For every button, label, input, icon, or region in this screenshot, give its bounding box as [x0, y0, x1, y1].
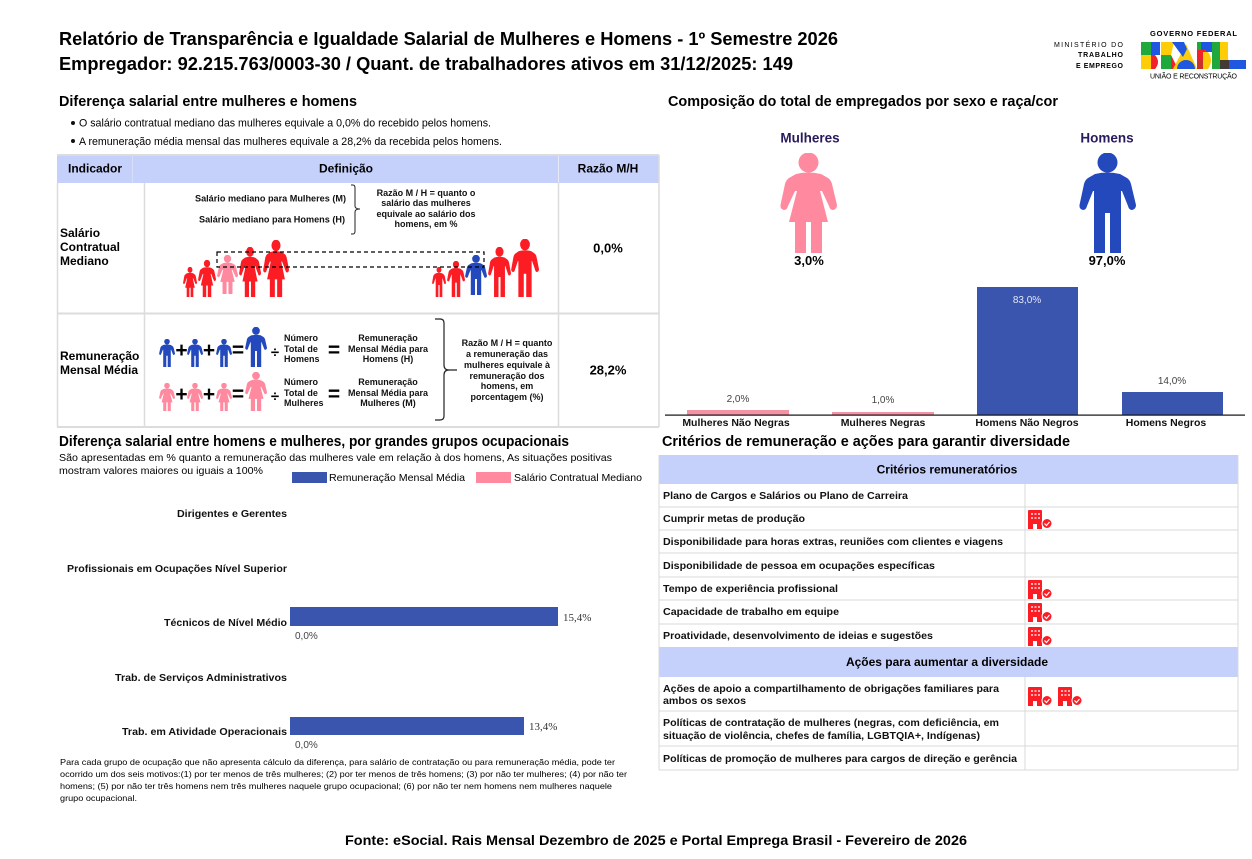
- table header: critérios remuneratórios: [659, 455, 1238, 484]
- brace: remuneração: [435, 319, 457, 420]
- formula: mulheres: Mulheres (M): [360, 398, 416, 408]
- panel: critérios de remuneração: [659, 434, 1238, 770]
- icon: grupo de homens: [432, 239, 539, 297]
- table rows: critérios: Cumprir metas de produção: [663, 513, 805, 525]
- bar chart: raça/cor: 2,0%: [727, 394, 750, 405]
- formula: homens: Homens: [284, 354, 320, 364]
- bar: técnicos: 15,4%: [563, 612, 591, 624]
- legend: [292, 472, 642, 484]
- category labels: [67, 508, 287, 738]
- panel: grupos ocupacionais: [59, 434, 642, 803]
- row label: salário contratual mediano: Contratual: [60, 240, 120, 254]
- row label: salário contratual mediano: Mediano: [60, 254, 109, 268]
- definition: razão remuneração: Razão M / H = quanto: [462, 338, 553, 348]
- formula: mulheres: Mensal Média para: [348, 388, 429, 398]
- table header: [57, 155, 659, 183]
- logo: governo federal brasil: GOVERNO FEDERAL: [1150, 29, 1237, 38]
- bar: técnicos: [290, 607, 591, 642]
- formula: mulheres: =: [232, 383, 244, 406]
- category labels: Trab. em Atividade Operacionais: [122, 726, 287, 738]
- text block: bullet points: A remuneração média mensal das mulheres equivale a 28,2% da recebida pelos homens.: [79, 136, 502, 148]
- text block: bullet points: [71, 118, 502, 148]
- footnote: homens; (5) por não ter três homens nem três mulheres naquele grupo ocupacional; (6) por não ter nem homens nem mulheres naquele: [60, 781, 612, 791]
- logo: governo federal brasil: [1141, 29, 1246, 80]
- table header: ações: [659, 647, 1238, 677]
- definition: razão salário: salário das mulheres: [381, 198, 471, 208]
- definition: razão salário: [376, 188, 476, 229]
- table header: ações: Ações para aumentar a diversidade: [846, 655, 1048, 669]
- figure: mulheres: [780, 130, 840, 268]
- row label: salário contratual mediano: [60, 226, 120, 268]
- table rows: ações: situação de violência, chefes de família, LGBTQIA+, Indígenas): [663, 730, 980, 742]
- title: [59, 29, 838, 74]
- formula: homens: Total de: [284, 344, 318, 354]
- definition: razão remuneração: a remuneração das: [466, 349, 548, 359]
- logo: ministério do trabalho e emprego: E EMPREGO: [1076, 63, 1124, 70]
- formula: homens: +: [203, 339, 215, 362]
- bar chart: raça/cor: Homens Não Negros: [975, 417, 1079, 429]
- bar chart: raça/cor: Mulheres Negras: [841, 417, 925, 429]
- table rows: critérios: Plano de Cargos e Salários ou Plano de Carreira: [663, 490, 908, 502]
- bar chart: raça/cor: 14,0%: [1158, 376, 1186, 387]
- icons: empresa com verificação: [1028, 510, 1082, 706]
- footnote: grupo ocupacional.: [60, 793, 137, 803]
- formula: homens: Homens (H): [363, 354, 413, 364]
- figure: homens: [1079, 130, 1136, 268]
- bar: trabalhadores em atividade operacionais: 0,0%: [295, 740, 318, 751]
- category labels: Dirigentes e Gerentes: [177, 508, 287, 520]
- table rows: critérios: Disponibilidade para horas extras, reuniões com clientes e viagens: [663, 536, 1003, 548]
- bar chart: raça/cor: Mulheres Não Negras: [682, 417, 790, 429]
- table header: critérios remuneratórios: Critérios remuneratórios: [877, 462, 1018, 476]
- bar: trabalhadores em atividade operacionais: 13,4%: [529, 721, 557, 733]
- definition: razão salário: homens, em %: [394, 219, 458, 229]
- footnote: Para cada grupo de ocupação que não apresenta cálculo da diferença, para salário de contratação ou para remuneração média, pode ter: [60, 757, 615, 767]
- logo: ministério do trabalho e emprego: MINISTÉRIO DO: [1054, 40, 1124, 49]
- panel: composição do total: [665, 94, 1245, 429]
- table rows: ações: Políticas de promoção de mulheres para cargos de direção e gerência: [663, 753, 1017, 765]
- table rows: critérios: Disponibilidade de pessoa em ocupações específicas: [663, 560, 935, 572]
- row label: remuneração mensal média: Remuneração: [60, 349, 139, 363]
- formula: homens: Mensal Média para: [348, 344, 429, 354]
- formula: homens: =: [328, 339, 340, 362]
- panel: diferença salarial: [57, 94, 659, 427]
- title: Relatório de Transparência e Igualdade Salarial de Mulheres e Homens - 1º Semestre 2026: [59, 29, 838, 49]
- logo: governo federal brasil: UNIÃO E RECONSTRUÇÃO: [1150, 72, 1238, 80]
- definition: razão remuneração: remuneração dos: [469, 371, 545, 381]
- formula: mulheres: =: [328, 383, 340, 406]
- bar chart: raça/cor: [665, 287, 1245, 429]
- text block: explicação: São apresentadas em % quanto a remuneração das mulheres vale em relação à dos homens, As situações positivas: [59, 452, 612, 464]
- table grid: [57, 155, 659, 427]
- table header: Razão M/H: [578, 162, 638, 176]
- value: salário contratual: 0,0%: [593, 240, 623, 256]
- legend: Remuneração Mensal Média: [329, 472, 465, 484]
- formula: homens: [159, 327, 429, 367]
- formula: mulheres: Número: [284, 377, 319, 387]
- text block: bullet points: O salário contratual mediano das mulheres equivale a 0,0% do recebido pelos homens.: [79, 118, 491, 130]
- dashed comparison box: [217, 252, 484, 267]
- table grid: [659, 455, 1238, 770]
- title: Empregador: 92.215.763/0003-30 / Quant. de trabalhadores ativos em 31/12/2025: 149: [59, 54, 793, 74]
- logo: ministério do trabalho e emprego: TRABALHO: [1078, 52, 1124, 59]
- legend: Salário Contratual Mediano: [514, 472, 642, 484]
- formula: mulheres: +: [203, 383, 215, 406]
- bar chart: raça/cor: 1,0%: [872, 395, 895, 406]
- heading: composição: Composição do total de empregados por sexo e raça/cor: [668, 94, 1058, 110]
- table rows: critérios: Capacidade de trabalho em equipe: [663, 606, 839, 618]
- definition: razão remuneração: mulheres equivale à: [464, 360, 551, 370]
- formula: mulheres: [159, 372, 429, 411]
- definition: razão remuneração: [462, 338, 553, 402]
- figure: mulheres: 3,0%: [794, 253, 824, 268]
- figure: homens: Homens: [1080, 130, 1134, 146]
- bar chart: raça/cor: 83,0%: [1013, 295, 1041, 306]
- source note: Fonte: eSocial. Rais Mensal Dezembro de 2025 e Portal Emprega Brasil - Fevereiro de 2026: [345, 833, 968, 848]
- formula: mulheres: Remuneração: [358, 377, 418, 387]
- table rows: ações: Ações de apoio a compartilhamento de obrigações familiares para: [663, 683, 999, 695]
- value: remuneração mensal: 28,2%: [590, 362, 627, 378]
- formula: homens: +: [175, 339, 188, 362]
- definition: salário mediano labels: Salário mediano para Mulheres (M): [195, 194, 346, 204]
- table rows: ações: [663, 683, 1017, 765]
- definition: razão salário: Razão M / H = quanto o: [377, 188, 476, 198]
- text block: explicação: mostram valores maiores ou iguais a 100%: [59, 465, 263, 477]
- formula: homens: =: [232, 339, 244, 362]
- footnote: ocorrido um dos seis motivos:(1) por ter menos de três mulheres; (2) por ter menos de três homens; (3) por não ter mulheres; (4) por não ter: [60, 769, 627, 779]
- figure: mulheres: Mulheres: [780, 130, 840, 146]
- definition: salário mediano labels: [195, 185, 360, 234]
- table rows: critérios: [663, 490, 1003, 642]
- table rows: ações: ambos os sexos: [663, 695, 746, 707]
- row label: salário contratual mediano: Salário: [60, 226, 100, 240]
- bar: trabalhadores em atividade operacionais: [290, 717, 557, 751]
- bar chart: raça/cor: Homens Negros: [1126, 417, 1206, 429]
- definition: razão salário: equivale ao salário dos: [376, 209, 476, 219]
- table rows: ações: Políticas de contratação de mulheres (negras, com deficiência, em: [663, 717, 999, 729]
- table header: Indicador: [68, 162, 122, 176]
- formula: mulheres: Total de: [284, 388, 318, 398]
- formula: mulheres: ÷: [271, 388, 279, 405]
- text block: explicação: [59, 452, 612, 477]
- category labels: Trab. de Serviços Administrativos: [115, 672, 287, 684]
- bar: técnicos: 0,0%: [295, 631, 318, 642]
- heading: grupos ocupacionais: Diferença salarial entre homens e mulheres, por grandes grupos ocupacionais: [59, 434, 569, 450]
- definition: salário mediano labels: Salário mediano para Homens (H): [199, 214, 345, 224]
- heading: diferença salarial: Diferença salarial entre mulheres e homens: [59, 94, 357, 110]
- definition: razão remuneração: homens, em: [481, 381, 533, 391]
- footnote: [60, 757, 627, 803]
- definition: razão remuneração: porcentagem (%): [470, 392, 544, 402]
- heading: critérios: Critérios de remuneração e ações para garantir diversidade: [662, 434, 1070, 450]
- row label: remuneração mensal média: [60, 349, 139, 377]
- figure: homens: 97,0%: [1089, 253, 1126, 268]
- table rows: critérios: Tempo de experiência profissional: [663, 583, 838, 595]
- formula: homens: ÷: [271, 344, 279, 361]
- row label: remuneração mensal média: Mensal Média: [60, 363, 138, 377]
- table header: Definição: [319, 162, 373, 176]
- category labels: Técnicos de Nível Médio: [164, 617, 287, 629]
- formula: mulheres: +: [175, 383, 188, 406]
- formula: homens: Remuneração: [358, 333, 418, 343]
- logo: ministério do trabalho e emprego: [1054, 40, 1124, 70]
- category labels: Profissionais em Ocupações Nível Superior: [67, 563, 287, 575]
- formula: mulheres: Mulheres: [284, 398, 324, 408]
- table rows: critérios: Proatividade, desenvolvimento de ideias e sugestões: [663, 630, 933, 642]
- formula: homens: Número: [284, 333, 319, 343]
- icon: grupo de mulheres: [183, 240, 289, 297]
